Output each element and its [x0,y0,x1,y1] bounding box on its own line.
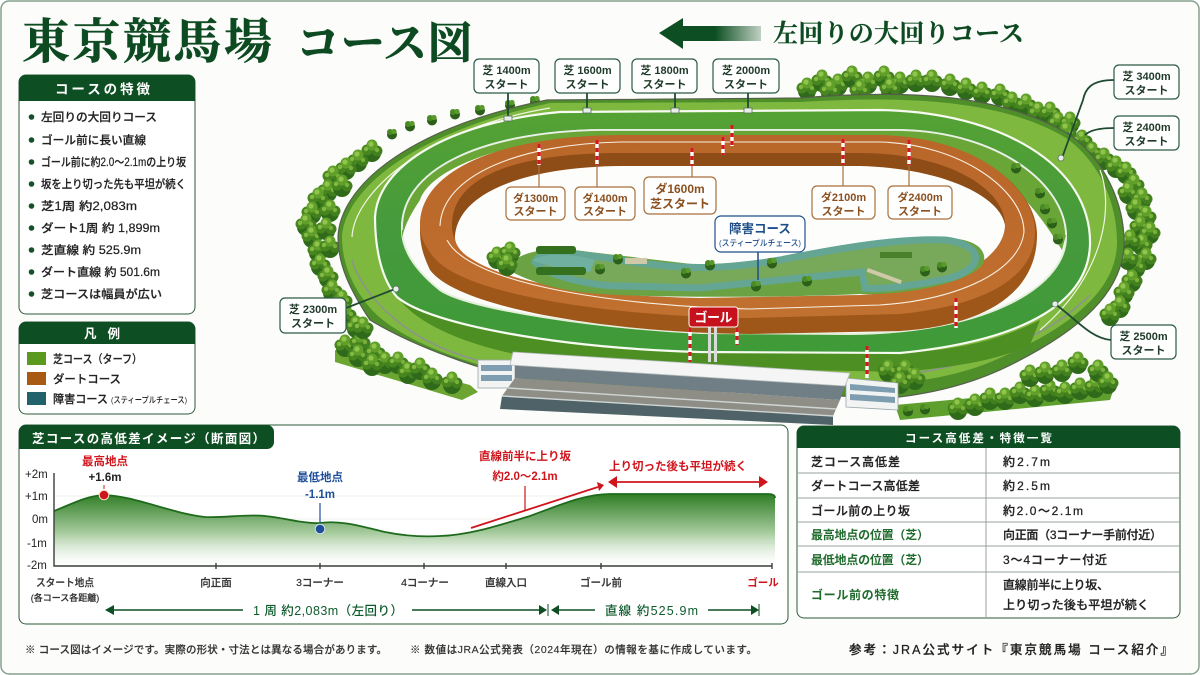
y axis labels: 0m [32,514,48,526]
grandstand seating [502,378,840,416]
label: turf 2300: 芝 2300m [289,302,337,316]
legend: steeple [27,392,187,406]
label: dirt 1400: スタート [583,205,627,218]
steeple pool [532,255,595,272]
y axis labels [25,469,48,572]
label: turf 1600: 芝 1600m [563,63,612,77]
heading: legend: 凡例 [84,327,120,341]
table rows: 最低地点の位置（芝） [811,552,929,567]
label: dirt 2100: ダ2100m [821,190,866,204]
label: dirt 2400: ダ2400m [897,190,943,204]
table rows: 上り切った後も平坦が続く [1003,597,1149,612]
heading: elevation: 芝コースの高低差イメージ（断面図） [32,431,265,446]
label: turf 1400 [474,59,539,93]
infield green strip [402,130,1066,250]
grandstand roof [510,352,850,386]
feature list: 左回りの大回りコース [41,110,157,124]
label: turf 1800: 芝 1800m [640,63,689,77]
table rows: 約2.7m [1003,454,1050,469]
annotation: uphill [471,449,604,528]
legend: dirt [27,372,121,386]
span: home straight [551,603,759,618]
label: turf 3400: 芝 3400m [1122,69,1171,83]
marker: lowest point [297,470,343,534]
direction heading: 左回りの大回りコース [773,20,1024,48]
table rows: 最高地点の位置（芝） [811,527,929,542]
label: dirt 1400: ダ1400m [582,191,628,205]
dirt course side [420,137,1037,334]
feature list: 芝コースは幅員が広い [41,287,162,301]
dirt leader lines [539,165,909,187]
span: one lap: 1 周 約2,083m（左回り） [253,603,403,618]
label: dirt 1300: ダ1300m [513,191,558,205]
footnote: image disclaimer: ※ コース図はイメージです。実際の形状・寸法とは異なる場合があります。 [25,643,387,656]
trees: outer left [296,96,540,338]
trees: top right [796,66,1080,144]
marker: highest point: +1.6m [89,472,121,484]
span: one lap [105,603,548,618]
table heading: コース高低差・特徴一覧 [905,431,1052,445]
label: turf 3400 [1114,65,1179,99]
panel: course features [19,75,195,314]
grandstand left wing [478,360,515,388]
heading: course features: コースの特徴 [55,81,150,97]
marker: lowest point: 最低地点 [297,470,343,484]
span: home straight: 直線 約525.9m [605,603,698,618]
panel: elevation table [797,426,1180,618]
table rows: 芝コース高低差 [811,454,900,469]
elevation chart [54,473,775,569]
trees: infield right [1011,163,1063,244]
footnote: data source: ※ 数値はJRA公式発表（2024年現在）の情報を基に作成しています。 [410,643,757,656]
dirt rails [440,142,1024,309]
feature list [29,110,186,301]
label: turf 1800: スタート [642,78,686,91]
title: コース図 [296,19,472,68]
label: dirt 2100: スタート [822,205,866,218]
label: turf 2400: 芝 2400m [1122,120,1171,134]
label: dirt 1400 [575,187,635,220]
label: turf 3400: スタート [1124,84,1168,97]
label: dirt 1300: スタート [514,205,558,218]
callout: steeple course: (スティープルチェース) [719,238,801,248]
table rows: 約2.0～2.1m [1003,503,1083,518]
feature list: 坂を上り切った先も平坦が続く [41,177,186,191]
y axis labels: +1m [25,491,48,503]
y axis labels: +2m [25,469,48,481]
label: dirt 1600: ダ1600m [655,181,705,196]
label: dirt 1600: 芝スタート [650,196,710,211]
label: turf 2500 [1111,325,1176,359]
table rows: 約2.5m [1003,478,1050,493]
table rows: ダートコース高低差 [811,478,920,493]
legend: turf: 芝コース（ターフ） [53,352,142,366]
label: dirt 2400: スタート [898,205,942,218]
y axis labels: -1m [27,538,47,550]
legend: steeple: (スティープルチェース) [111,395,187,405]
infield [402,130,1066,334]
panel: elevation profile [19,425,788,624]
arrow: counterclockwise direction [659,18,761,49]
outer turf light band [342,99,1117,384]
x axis labels: (各コース各距離) [31,592,99,603]
trees: right [1072,130,1160,326]
table heading [797,426,1180,448]
table rows: 向正面（3コーナー手前付近） [1003,527,1162,542]
grandstand front rail [502,388,836,416]
trees: lower left [334,316,478,400]
table rows: 3～4コーナー付近 [1003,553,1107,567]
label: turf 2500: 芝 2500m [1119,329,1168,343]
annotation: flat section: 上り切った後も平坦が続く [609,459,747,473]
marker: highest point: 最高地点 [82,454,128,468]
callouts: dirt starts [506,165,952,220]
label: dirt 1300 [506,187,565,220]
x axis labels: 4コーナー [401,577,449,589]
label: dirt 2400 [888,186,952,219]
dirt inner wall [452,153,1005,298]
table rows [811,454,1162,612]
legend: dirt: ダートコース [53,372,121,386]
callout: steeple course [715,216,805,280]
annotation: flat section [608,459,768,488]
feature list: ゴール前に約2.0～2.1mの上り坂 [41,155,186,169]
grandstand right wing [846,378,898,410]
grandstand [478,352,898,425]
label: turf 2000: 芝 2000m [722,63,770,77]
label: turf 2300 [280,298,346,333]
x axis labels [31,576,779,603]
panel: legend [19,322,195,414]
title: 東京競馬場 [22,16,272,69]
x axis labels: スタート地点 [36,576,94,589]
infield center [455,166,1005,298]
goal sign: ゴール [694,310,732,325]
x axis labels: ゴール [747,576,779,589]
inner rail [402,130,1066,235]
grandstand concourse [515,364,845,400]
grandstand base [500,396,833,425]
leader lines [346,80,1114,340]
feature list: ダート直線 約 501.6m [41,265,160,279]
label: turf 2000: スタート [724,78,768,91]
steeple base [505,238,984,297]
table rows: 直線前半に上り坂、 [1003,577,1109,592]
label: turf 2500: スタート [1122,344,1166,357]
feature list: ダート1周 約 1,899m [41,221,160,235]
label: turf 1400: 芝 1400m [482,63,531,77]
label: turf 2400 [1114,116,1179,150]
label: turf 1600 [555,59,620,93]
table rows: ゴール前の特徴 [811,587,899,602]
outer gray rail [352,260,1090,376]
feature list: ゴール前に長い直線 [41,133,147,147]
main turf band [375,110,1090,353]
feature list: 芝直線 約 525.9m [41,243,141,257]
annotation: uphill: 約2.0～2.1m [492,469,558,483]
label: turf 2300: スタート [291,317,335,330]
steeple track [535,240,976,288]
annotation: uphill: 直線前半に上り坂 [479,449,571,463]
heading: elevation [19,425,274,449]
marker: highest point [82,454,128,500]
marker: lowest point: -1.1m [305,489,335,501]
x axis labels: 3コーナー [296,577,344,589]
legend: steeple: 障害コース [53,392,108,406]
trees: lower right [878,352,1118,420]
label: turf 1800 [632,59,697,93]
steeple hedges [486,242,947,292]
label: turf 1600: スタート [566,78,610,91]
x axis labels: 向正面 [200,576,232,589]
feature list: 芝1周 約2,083m [41,199,137,213]
callouts: turf starts [280,59,1179,359]
label: turf 2000 [713,59,779,93]
main turf lower wall [397,297,1040,372]
label: dirt 1600 [644,177,716,214]
title [22,16,472,69]
label: turf 2400: スタート [1124,135,1168,148]
x axis labels: 直線入口 [485,576,527,589]
dirt course surface [420,135,1035,318]
reference: 参考：JRA公式サイト『東京競馬場 コース紹介』 [849,642,1173,657]
outer turf rim [338,94,1124,398]
label: dirt 2100 [812,186,875,219]
table grid [797,448,1180,618]
label: turf 1400: スタート [484,78,528,91]
callout: steeple course: 障害コース [729,221,791,236]
leader end markers [393,108,1064,307]
x axis labels: ゴール前 [580,576,622,589]
goal sign [689,307,738,362]
start poles [539,125,956,378]
legend: turf [27,352,142,366]
y axis labels: -2m [27,560,47,572]
course map [296,66,1160,425]
outer white line [352,108,1106,330]
table rows: ゴール前の上り坂 [811,503,910,518]
